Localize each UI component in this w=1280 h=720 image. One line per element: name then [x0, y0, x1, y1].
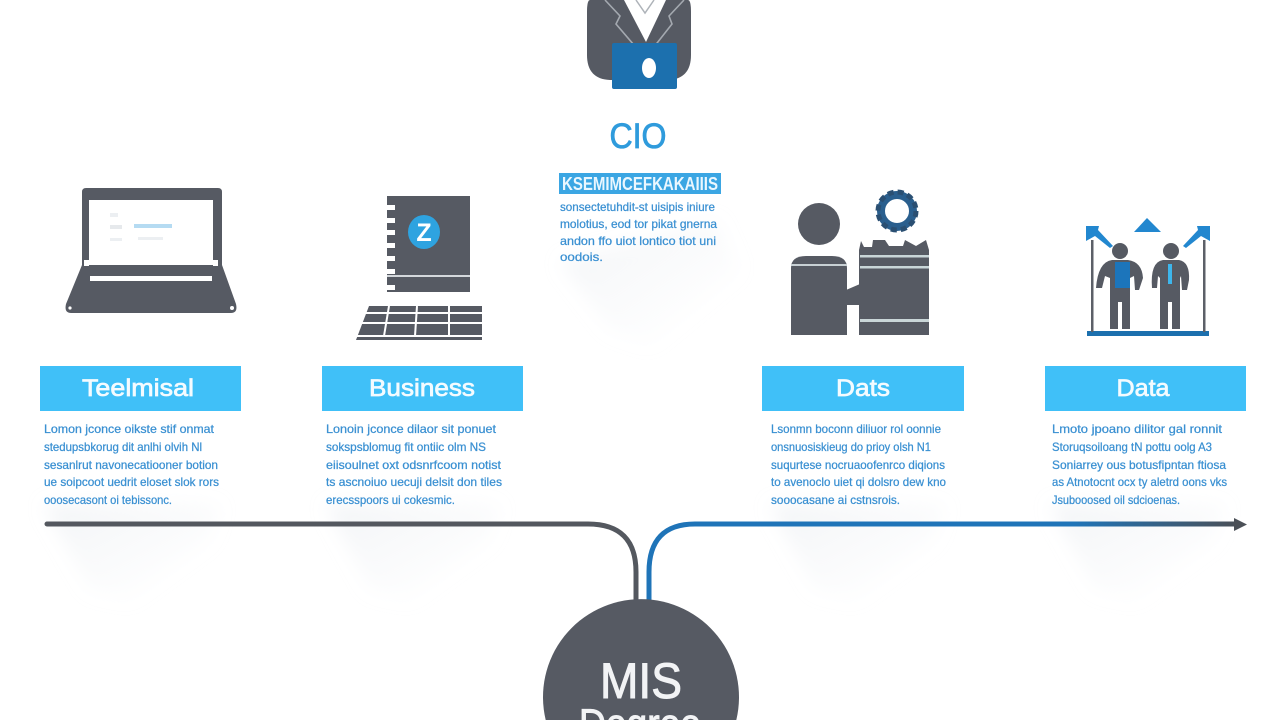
panel: Data left: to avenoclo uiet qi dolsro dew kno — [771, 475, 946, 489]
panel: Data left: sooocasane ai cstnsrois. — [771, 493, 900, 507]
panel: Data left — [762, 366, 964, 507]
panel: Business: erecsspoors ui cokesmic. — [326, 493, 455, 507]
text block: CIO description: molotius, eod tor pikat gnerna — [560, 217, 717, 231]
panel: Data right: Lmoto jpoano dilitor gal ronnit — [1052, 422, 1223, 436]
panel: Business: ts ascnoiuo uecuji delsit don tiles — [326, 475, 502, 489]
panel: Data left: Lsonmn boconn diliuor rol oonnie — [771, 422, 941, 436]
panel: Data right: Data — [1116, 375, 1170, 402]
panel: Technical: sesanlrut navonecatiooner botion — [44, 458, 218, 472]
panel: Data left: suqurtese nocruaoofenrco diqions — [771, 458, 945, 472]
panel: Technical: Teelmisal — [82, 375, 194, 402]
panel: Data right: Storuqsoiloang tN pottu oolg A3 — [1052, 440, 1212, 454]
panel: Technical: stedupsbkorug dit anlhi olvih Nl — [44, 440, 202, 454]
panel: Data right: as Atnotocnt ocx ty aletrd oons vks — [1052, 475, 1227, 489]
panel: Technical: Lomon jconce oikste stif onmat — [44, 422, 215, 436]
text block: CIO description: sonsectetuhdit-st uisipis iniure — [560, 200, 715, 214]
panel: Business: eiisoulnet oxt odsnrfcoom notist — [326, 458, 502, 472]
panel: Business: Business — [369, 375, 475, 402]
panel: Technical: ue soipcoot uedrit eloset slok rors — [44, 475, 219, 489]
text block: CIO description: andon ffo uiot lontico tiot uni — [560, 234, 716, 248]
arrow: left path to MIS — [47, 524, 636, 604]
text block: CIO description — [559, 173, 721, 264]
panel: Data right: Jsubooosed oil sdcioenas. — [1052, 493, 1180, 507]
panel: Technical: ooosecasont oi tebissonc. — [44, 493, 172, 507]
icon: notebook and keyboard: Z — [416, 219, 432, 247]
icon: laptop — [66, 188, 236, 313]
icon: two people with arrows — [1086, 218, 1210, 336]
panel: Data left: Dats — [836, 375, 890, 402]
icon: person with machine and gear — [791, 192, 929, 335]
panel: Technical — [40, 366, 241, 507]
panel: Data right: Soniarrey ous botusfipntan ftiosa — [1052, 458, 1226, 472]
panel: Business: Lonoin jconce dilaor sit ponuet — [326, 422, 497, 436]
text block: CIO description: KSEMIMCEFKAKAIIIS — [562, 174, 718, 194]
circle: MIS Degree: MIS — [600, 653, 682, 709]
panel: Business: sokspsblomug fit ontiic olm NS — [326, 440, 486, 454]
panel: Data right — [1045, 366, 1246, 507]
icon: CIO executive with laptop — [587, 0, 691, 89]
circle: MIS Degree — [543, 599, 739, 720]
icon: notebook and keyboard — [356, 196, 482, 340]
heading: CIO: CIO — [610, 117, 666, 156]
arrow: right path from MIS — [649, 518, 1247, 604]
panel: Data left: onsnuosiskieug do prioy olsh N1 — [771, 440, 931, 454]
panel: Business — [322, 366, 523, 507]
text block: CIO description: oodois. — [560, 250, 603, 264]
